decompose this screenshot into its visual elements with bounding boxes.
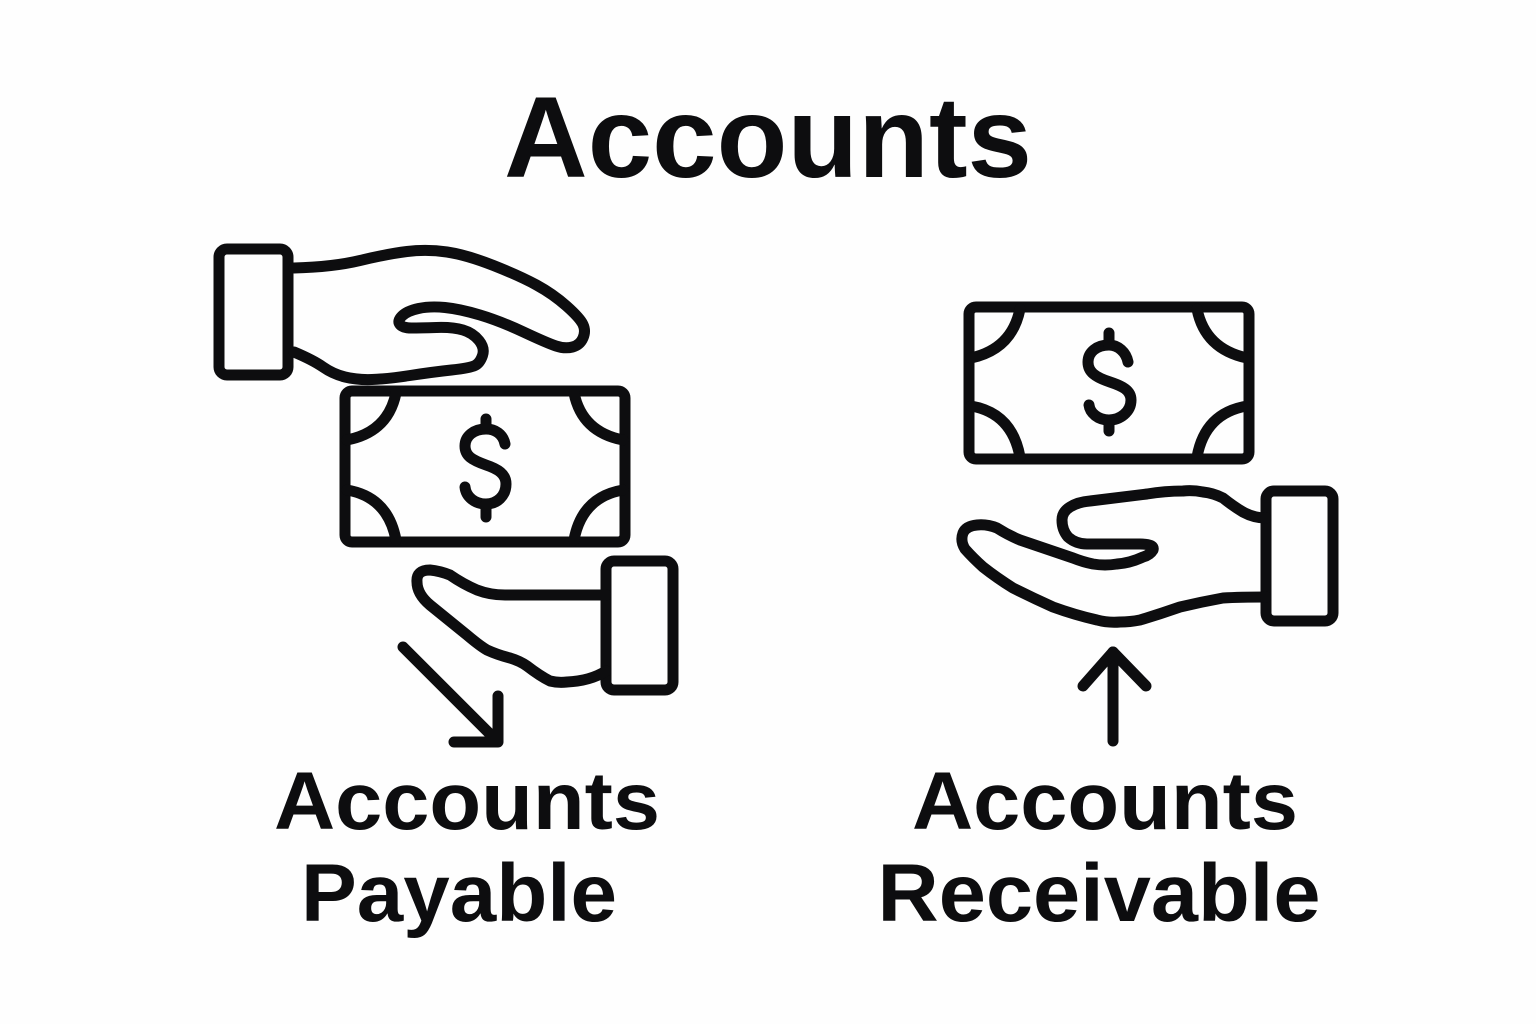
arrow: down right — [403, 647, 498, 742]
icon: receiving hand bottom — [417, 561, 673, 690]
icon: open hand — [962, 491, 1333, 622]
icon: giving hand top — [219, 249, 584, 380]
panel: accounts receivable — [878, 307, 1333, 939]
icon: dollar bill left — [345, 391, 625, 542]
icon: dollar bill right — [969, 307, 1249, 459]
label: accounts receivable: Accounts — [912, 756, 1298, 847]
label: accounts payable: Payable — [301, 848, 617, 939]
panel: accounts payable — [219, 249, 673, 939]
label: accounts receivable — [878, 756, 1320, 939]
label: accounts payable: Accounts — [274, 756, 660, 847]
label: accounts payable — [274, 756, 660, 939]
title: Accounts — [504, 74, 1032, 202]
label: accounts receivable: Receivable — [878, 848, 1320, 939]
arrow: up — [1083, 652, 1146, 741]
